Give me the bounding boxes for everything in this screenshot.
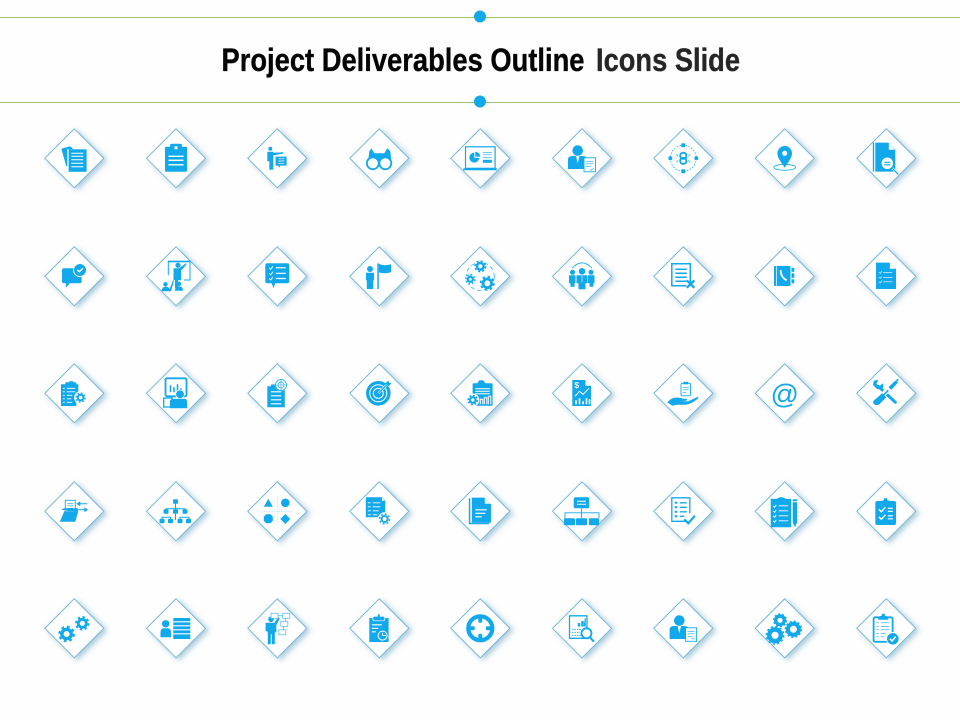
icon: two gears — [45, 599, 104, 658]
icon: list with cross — [654, 247, 713, 306]
bottom divider with blue dot — [0, 96, 960, 108]
icon: team of three — [552, 247, 612, 306]
icon: person with flag — [350, 247, 409, 306]
icon: document checklist — [857, 247, 916, 306]
icon: chart report with magnifier — [552, 599, 612, 658]
icon: person with clipboard — [654, 599, 713, 658]
icon: speech bubble checklist — [248, 247, 307, 306]
icon: presenter at board with audience — [146, 247, 206, 306]
icon: organisation chart — [146, 482, 206, 541]
icon: document with target — [248, 364, 307, 423]
icon: location pin — [755, 129, 814, 188]
icon: clipboard with check badge — [857, 599, 916, 658]
icon: document pages — [451, 482, 510, 541]
icon: documents — [45, 129, 104, 188]
icon: at sign: @ — [770, 378, 799, 409]
icon: three large gears — [755, 599, 814, 658]
icon: person with clipboard — [552, 129, 612, 188]
icon: document with magnifier — [857, 129, 916, 188]
icon: crosshair circle — [451, 599, 510, 658]
icon: clipboard with clock — [350, 599, 409, 658]
icon: person with flow diagram — [248, 599, 307, 658]
icon: hand holding clipboard — [654, 364, 713, 423]
icon: three gears in cycle — [451, 247, 510, 306]
icon: clipboard — [146, 129, 206, 188]
icon: chain link in orbit — [654, 129, 713, 188]
icon: clipboard with gear — [45, 364, 104, 423]
icon: document with gear — [350, 482, 409, 541]
icon: target with arrow — [350, 364, 409, 423]
icon: laptop with pie chart — [451, 129, 510, 188]
icon: clipboard with gear and bars — [451, 364, 510, 423]
top divider with blue dot — [0, 10, 960, 22]
icon: at sign — [755, 364, 814, 423]
icon: monitor with analyst — [146, 364, 206, 423]
icon: person and list — [146, 599, 206, 658]
icon: phone book — [755, 247, 814, 306]
icon: hierarchy blocks — [552, 482, 612, 541]
icon: financial report — [552, 364, 612, 423]
icon: person with speech bubble — [248, 129, 307, 188]
icon: financial report: $ — [574, 380, 579, 390]
title: Icons Slide — [596, 42, 740, 78]
icon: four shapes — [248, 482, 307, 541]
icon: clipboard with checks — [857, 482, 916, 541]
icon: wrench and screwdriver — [857, 364, 916, 423]
icon: chat bubble with check — [45, 247, 104, 306]
title: Project Deliverables Outline — [222, 42, 584, 78]
icon: clipboard and pencil — [755, 482, 814, 541]
icon: checklist with tick — [654, 482, 713, 541]
icon: folder with arrows — [45, 482, 104, 541]
icon: binoculars — [350, 129, 409, 188]
